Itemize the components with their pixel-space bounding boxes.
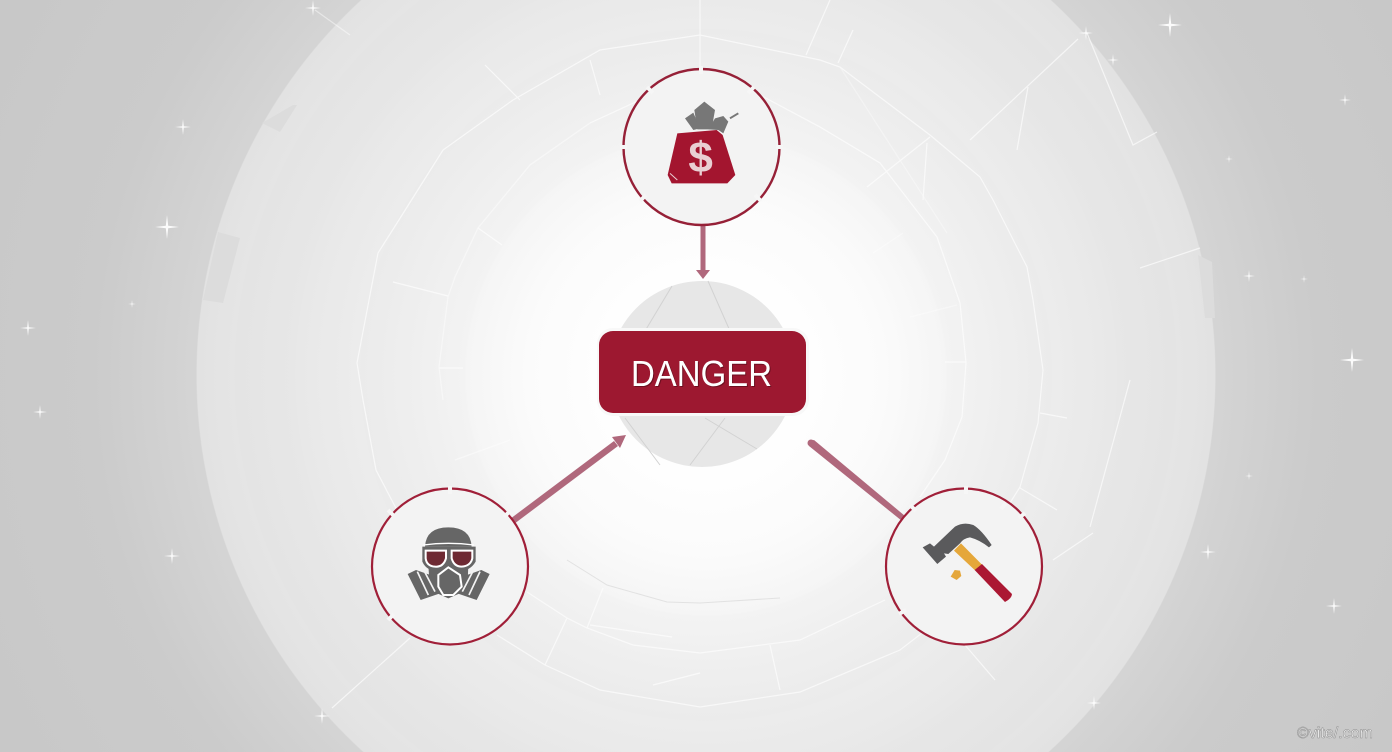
background crack lines bbox=[315, 0, 1200, 708]
icon: hammer bbox=[923, 524, 1012, 602]
center circle bbox=[609, 281, 795, 467]
node: gas mask bbox=[372, 486, 528, 644]
arrow: top to center bbox=[696, 225, 710, 279]
danger badge bbox=[597, 328, 809, 416]
arrow: left to center bbox=[510, 435, 626, 524]
danger badge: DANGER bbox=[631, 353, 772, 394]
watermark: ©vite/.com bbox=[1297, 725, 1373, 742]
icon: money bag: $ bbox=[688, 134, 713, 183]
node: money bag bbox=[620, 66, 783, 225]
icon: gas mask bbox=[408, 527, 490, 600]
arrow: right to center bbox=[808, 440, 905, 521]
icon: money bag bbox=[668, 102, 738, 183]
node: hammer bbox=[886, 486, 1042, 644]
